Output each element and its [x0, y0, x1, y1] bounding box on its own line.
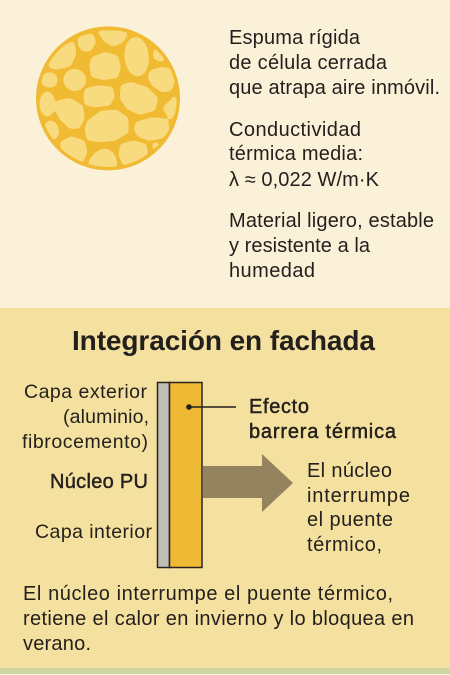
- text block: material properties: Material ligero, estable: [229, 210, 434, 232]
- text block: arrow explanation: térmico,: [307, 534, 382, 556]
- text block: conclusion: retiene el calor en invierno y lo bloquea en: [23, 608, 414, 630]
- text block: conclusion: El núcleo interrumpe el puente térmico,: [23, 583, 393, 605]
- callout: thermal barrier effect: [249, 396, 397, 443]
- heading: Integración en fachada: Integración en fachada: [72, 325, 375, 356]
- text block: arrow explanation: El núcleo: [307, 460, 392, 482]
- diagram: wall panel section: [158, 382, 202, 568]
- text block: arrow explanation: interrumpe: [307, 485, 410, 507]
- text block: conclusion: [23, 583, 414, 655]
- bottom green strip: [0, 668, 450, 674]
- callout: thermal barrier effect: barrera térmica: [249, 421, 397, 443]
- text block: material properties: humedad: [229, 260, 315, 282]
- text block: material properties: [229, 210, 434, 282]
- text block: material properties: y resistente a la: [229, 235, 371, 257]
- text block: closed cell foam: Espuma rígida: [229, 27, 361, 49]
- label: outer layer: [22, 381, 149, 453]
- text block: closed cell foam: de célula cerrada: [229, 52, 388, 74]
- text block: closed cell foam: [229, 27, 440, 99]
- arrow: heat flow: [203, 454, 293, 512]
- text block: thermal conductivity: [229, 119, 380, 191]
- label: PU core: Núcleo PU: [50, 471, 148, 493]
- label: outer layer: fibrocemento): [22, 431, 148, 453]
- callout leader line: [186, 404, 236, 410]
- text block: closed cell foam: que atrapa aire inmóvil.: [229, 77, 440, 99]
- text block: thermal conductivity: λ ≈ 0,022 W/m·K: [229, 169, 380, 191]
- label: outer layer: (aluminio,: [63, 406, 149, 428]
- text block: arrow explanation: el puente: [307, 509, 393, 531]
- text block: thermal conductivity: térmica media:: [229, 143, 363, 165]
- callout: thermal barrier effect: Efecto: [249, 396, 309, 418]
- label: inner layer: Capa interior: [35, 521, 152, 543]
- text block: conclusion: verano.: [23, 633, 91, 655]
- text block: arrow explanation: [307, 460, 410, 556]
- panel: integration section background: [0, 308, 450, 668]
- text block: thermal conductivity: Conductividad: [229, 119, 361, 141]
- icon: closed-cell foam circle: [36, 26, 180, 170]
- label: outer layer: Capa exterior: [24, 381, 148, 403]
